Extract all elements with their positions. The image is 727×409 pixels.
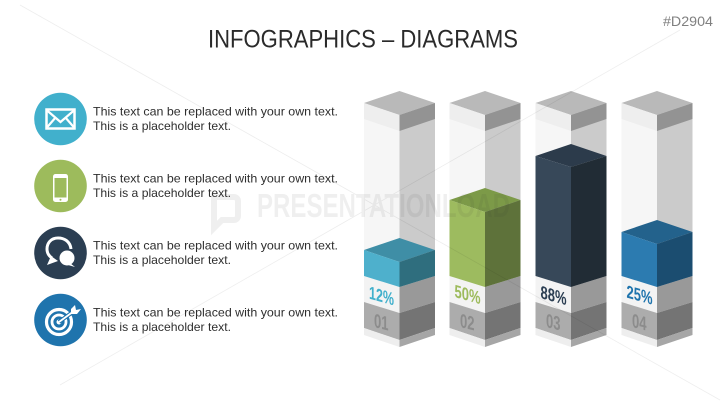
list item 2 [34,160,338,212]
list item 3 [34,227,338,279]
column 1: 12% [364,91,435,347]
text block 2: This text can be replaced with your own text. [93,172,338,186]
column 2: 50% [450,91,520,347]
percent label: 50% [454,280,480,308]
icon: smartphone [34,160,87,212]
title: INFOGRAPHICS – DIAGRAMS [208,26,518,54]
number label: 02 [460,310,474,336]
percent label: 12% [369,282,394,309]
column 3: 88% [536,91,606,347]
base [364,276,435,347]
glass body [450,103,520,287]
fill block [536,144,606,287]
glass body [536,103,606,287]
text block 4: This text can be replaced with your own text. [93,306,338,320]
cap [450,91,520,131]
cap [622,91,692,131]
glass body [364,103,435,287]
base [622,276,692,347]
list item 1 [34,93,338,145]
glass body [622,103,692,287]
code label: #D2904 [663,13,713,29]
text block 1: This text can be replaced with your own text. [93,104,338,118]
list item 4 [34,294,338,346]
number label: 03 [546,310,560,336]
text block 2: This is a placeholder text. [93,186,231,200]
fill block [364,238,435,287]
watermark overlay: PRESENTATIONLOAD [257,187,510,224]
cap [536,91,606,131]
base [536,276,606,347]
icon: speech bubbles [34,227,87,279]
fill block [622,220,692,287]
number label: 01 [374,310,388,336]
base [450,276,520,347]
column 4: 25% [622,91,692,347]
text block 3: This is a placeholder text. [93,253,231,267]
icon: target [34,294,87,346]
percent label: 25% [626,281,652,309]
cap [364,91,435,131]
text block 1: This is a placeholder text. [93,119,231,133]
text block 3: This text can be replaced with your own text. [93,238,338,252]
percent label: 88% [540,281,566,309]
text block 4: This is a placeholder text. [93,320,231,334]
fill block [450,188,520,287]
number label: 04 [632,310,646,336]
icon: envelope [34,93,87,145]
